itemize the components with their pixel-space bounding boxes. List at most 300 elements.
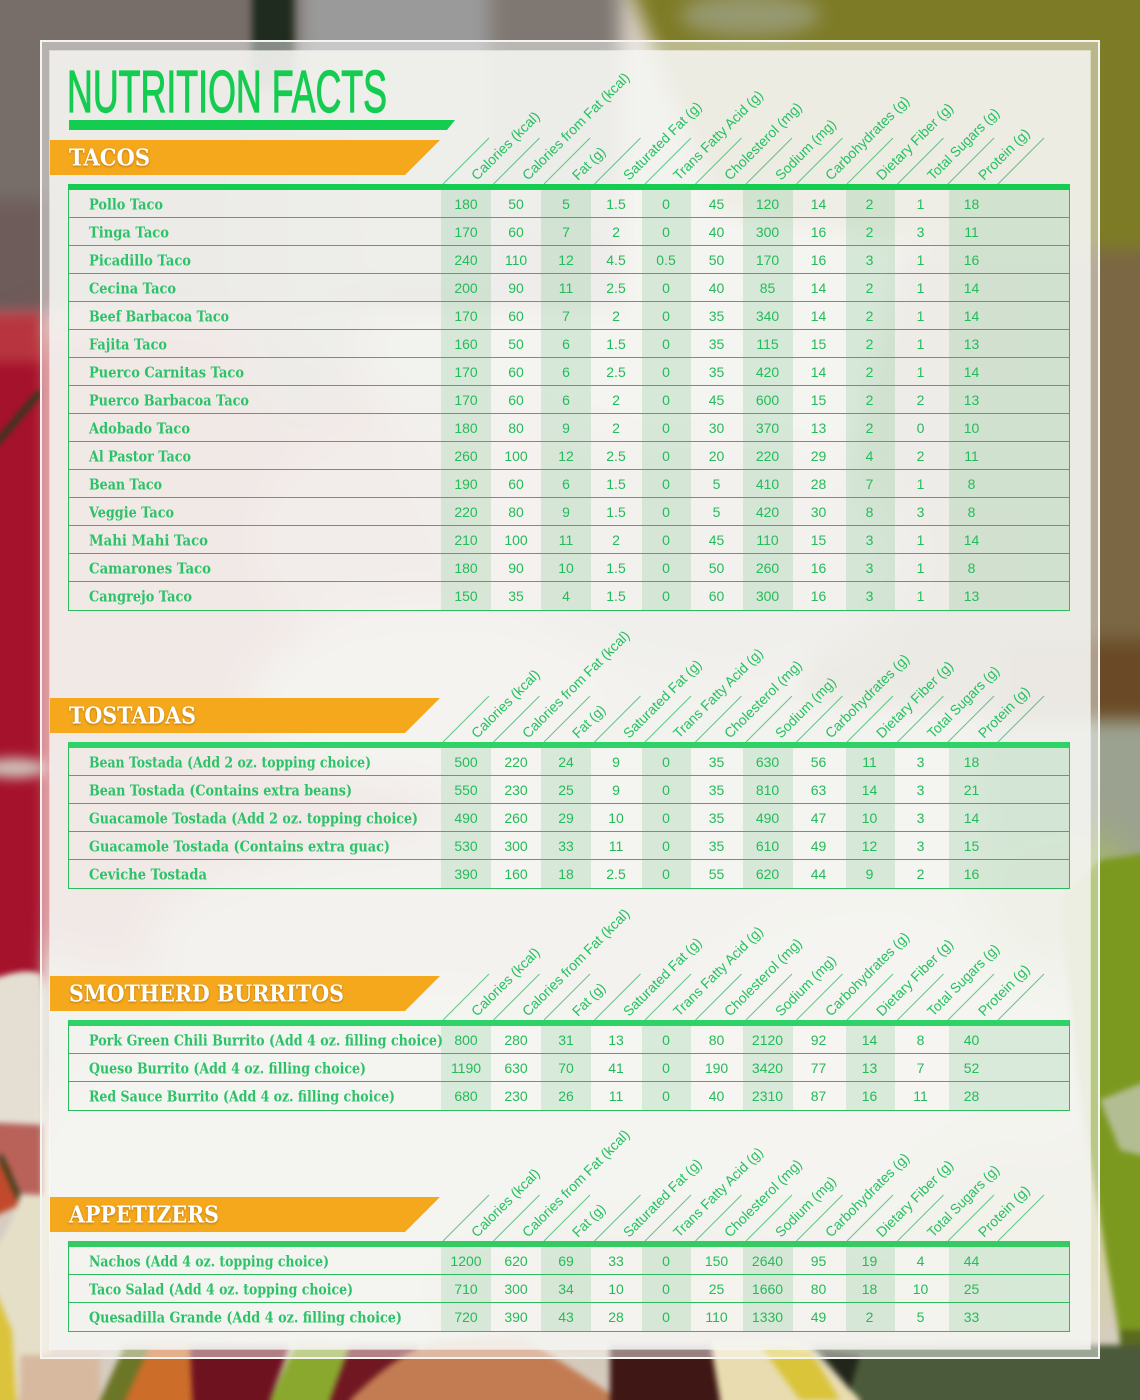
row: Queso Burrito: 41: [608, 1060, 624, 1076]
row: Ceviche Tostada: Ceviche Tostada: [89, 866, 208, 884]
column headers: tacos: Sodium (mg): [772, 116, 839, 183]
row: Queso Burrito: 1190: [451, 1060, 481, 1076]
row: Ceviche Tostada: 620: [756, 866, 779, 882]
row: Tinga Taco: 0: [662, 224, 670, 240]
row: Puerco Barbacoa Taco: Puerco Barbacoa Taco: [89, 392, 249, 410]
row: Queso Burrito: 52: [964, 1060, 979, 1076]
row: Bean Tostada, extra beans: 0: [662, 782, 670, 798]
row: Nachos: 19: [862, 1253, 877, 1269]
row: Veggie Taco: 0: [662, 504, 670, 520]
row: Ceviche Tostada: 0: [662, 866, 670, 882]
row: Fajita Taco: 15: [811, 336, 826, 352]
row: Nachos: 2640: [752, 1253, 783, 1269]
row: Tinga Taco: 16: [811, 224, 826, 240]
row: Camarones Taco: 3: [866, 560, 873, 576]
row: Taco Salad: 25: [709, 1281, 724, 1297]
row: Bean Tostada, extra beans: 550: [454, 782, 478, 798]
row: Quesadilla Grande: 0: [662, 1309, 670, 1325]
row: Pollo Taco: 180: [454, 196, 478, 212]
row: Pollo Taco: 120: [756, 196, 779, 212]
row: Mahi Mahi Taco: 15: [811, 532, 826, 548]
row: Bean Taco: 8: [968, 476, 975, 492]
row: Picadillo Taco: 3: [866, 252, 873, 268]
row: Tinga Taco: 300: [756, 224, 779, 240]
row: Nachos: Nachos (Add 4 oz. topping choice): [89, 1254, 329, 1270]
row: Picadillo Taco: Picadillo Taco: [89, 252, 191, 270]
row: Cangrejo Taco: 150: [454, 588, 478, 604]
column headers: appetizers: Saturated Fat (g): [620, 1155, 705, 1240]
row: Pollo Taco: 14: [811, 196, 826, 212]
row: Cecina Taco: 85: [760, 280, 775, 296]
row: Red Sauce Burrito: 2310: [752, 1088, 783, 1104]
table: tacos: [68, 184, 1070, 611]
row: Picadillo Taco: 12: [558, 252, 574, 268]
row: Adobado Taco: 9: [562, 420, 570, 436]
row: Ceviche Tostada: 160: [504, 866, 528, 882]
row: Pork Green Chili Burrito: 280: [504, 1032, 528, 1048]
column headers: smotherd burritos: Fat (g): [569, 980, 608, 1019]
row: Camarones Taco: 16: [811, 560, 826, 576]
row: Guacamole Tostada, topping choice: Guacamole Tostada (Add 2 oz. topping choice): [89, 810, 418, 828]
row: Picadillo Taco: 170: [756, 252, 779, 268]
row: Mahi Mahi Taco: 3: [866, 532, 873, 548]
column headers: smotherd burritos: Calories (kcal): [468, 944, 543, 1019]
row: Mahi Mahi Taco: 14: [964, 532, 979, 548]
row: Queso Burrito: 630: [504, 1060, 528, 1076]
column headers: tacos: Trans Fatty Acid (g): [670, 87, 766, 183]
row: Taco Salad: 34: [558, 1281, 574, 1297]
row: Pork Green Chili Burrito: 31: [558, 1032, 574, 1048]
row: Bean Taco: 1.5: [606, 476, 626, 492]
row: Cecina Taco: 14: [964, 280, 979, 296]
row: Pollo Taco: 0: [662, 196, 670, 212]
row: Pork Green Chili Burrito: 40: [964, 1032, 979, 1048]
row: Bean Taco: 190: [454, 476, 478, 492]
row: Fajita Taco: 35: [709, 336, 724, 352]
row: Al Pastor Taco: [69, 442, 1069, 470]
row: Queso Burrito: 7: [917, 1060, 924, 1076]
row: Ceviche Tostada: 44: [811, 866, 826, 882]
row: Guacamole Tostada, topping choice: 0: [662, 810, 670, 826]
row: Queso Burrito: 13: [862, 1060, 877, 1076]
column headers: tostadas: Calories from Fat (kcal): [519, 627, 633, 741]
row: Al Pastor Taco: 12: [558, 448, 574, 464]
row: Bean Taco: 410: [756, 476, 779, 492]
row: Guacamole Tostada, topping choice: 35: [709, 810, 724, 826]
row: Bean Taco: Bean Taco: [89, 476, 162, 494]
row: Nachos: 150: [705, 1253, 728, 1269]
row: Puerco Barbacoa Taco: 2: [917, 392, 924, 408]
column headers: smotherd burritos: Calories from Fat (kcal): [519, 905, 633, 1019]
row: Camarones Taco: 90: [508, 560, 524, 576]
row: Guacamole Tostada, extra guac: 35: [709, 838, 724, 854]
row: Al Pastor Taco: 29: [811, 448, 826, 464]
row: Puerco Carnitas Taco: 35: [709, 364, 724, 380]
ribbon: tacos: TACOS: [69, 144, 150, 172]
row: Veggie Taco: 5: [713, 504, 720, 520]
row: Fajita Taco: 13: [964, 336, 979, 352]
row: Beef Barbacoa Taco: 340: [756, 308, 779, 324]
row: Tinga Taco: 3: [917, 224, 924, 240]
row: Puerco Barbacoa Taco: 15: [811, 392, 826, 408]
row: Al Pastor Taco: 100: [504, 448, 528, 464]
row: Quesadilla Grande: 49: [811, 1309, 826, 1325]
row: Queso Burrito: 77: [811, 1060, 826, 1076]
row: Ceviche Tostada: 18: [558, 866, 574, 882]
row: Quesadilla Grande: 5: [917, 1309, 924, 1325]
row: Ceviche Tostada: 9: [866, 866, 873, 882]
row: Puerco Carnitas Taco: 2: [866, 364, 873, 380]
row: Red Sauce Burrito: 40: [709, 1088, 724, 1104]
row: Quesadilla Grande: [89, 1309, 979, 1326]
row: Veggie Taco: 220: [454, 504, 478, 520]
row: Cecina Taco: [69, 274, 1069, 302]
row: Mahi Mahi Taco: 0: [662, 532, 670, 548]
ribbon: tostadas: TOSTADAS: [69, 702, 196, 730]
column headers: tostadas: Dietary Fiber (g): [873, 658, 956, 741]
row: Guacamole Tostada, extra guac: 49: [811, 838, 826, 854]
row: Camarones Taco: 10: [558, 560, 574, 576]
row: Guacamole Tostada, extra guac: [69, 832, 1069, 860]
row: Puerco Carnitas Taco: 14: [964, 364, 979, 380]
row: Puerco Carnitas Taco: Puerco Carnitas Taco: [89, 364, 244, 382]
row: Adobado Taco: Adobado Taco: [88, 420, 190, 438]
row: Guacamole Tostada, extra guac: 11: [609, 838, 623, 854]
row: Taco Salad: 80: [811, 1281, 826, 1297]
row: Cangrejo Taco: 16: [811, 588, 826, 604]
row: Bean Tostada, extra beans: Bean Tostada (Contains extra beans): [89, 782, 352, 800]
row: Red Sauce Burrito: 11: [609, 1088, 623, 1104]
row: Fajita Taco: 1: [917, 336, 924, 352]
row: Quesadilla Grande: 1330: [752, 1309, 783, 1325]
column headers: tostadas: Saturated Fat (g): [620, 656, 705, 741]
row: Fajita Taco: 115: [756, 336, 779, 352]
column headers: tostadas: Total Sugars (g): [924, 663, 1002, 741]
row: Tinga Taco: 60: [508, 224, 524, 240]
row: Al Pastor Taco: 4: [866, 448, 873, 464]
row: Pork Green Chili Burrito: [69, 1026, 1069, 1054]
row: Adobado Taco: 370: [756, 420, 779, 436]
row: Quesadilla Grande: 28: [608, 1309, 624, 1325]
row: Taco Salad: 300: [504, 1281, 528, 1297]
row: Al Pastor Taco: Al Pastor Taco: [88, 448, 191, 466]
column headers: tostadas: Trans Fatty Acid (g): [670, 645, 766, 741]
row: Puerco Barbacoa Taco: 600: [756, 392, 779, 408]
column headers: tostadas: Calories (kcal): [468, 666, 543, 741]
row: Cecina Taco: 11: [559, 280, 573, 296]
table: appetizers: [68, 1241, 1070, 1332]
row: Guacamole Tostada, topping choice: 3: [917, 810, 924, 826]
row: Pollo Taco: 1.5: [606, 196, 626, 212]
column headers: appetizers: Calories from Fat (kcal): [519, 1126, 633, 1240]
row: Mahi Mahi Taco: [69, 526, 1069, 554]
ribbon: appetizers: [50, 1197, 440, 1232]
row: Quesadilla Grande: 43: [558, 1309, 574, 1325]
row: Adobado Taco: [69, 414, 1069, 442]
row: Quesadilla Grande: Quesadilla Grande (Add 4 oz. filling choice): [89, 1310, 402, 1326]
row: Bean Tostada, extra beans: 9: [612, 782, 620, 798]
row: Queso Burrito: 3420: [752, 1060, 783, 1076]
row: Ceviche Tostada: 2.5: [606, 866, 626, 882]
column headers: tacos: Protein (g): [975, 125, 1033, 183]
row: Veggie Taco: Veggie Taco: [88, 504, 174, 522]
row: Queso Burrito: 0: [662, 1060, 670, 1076]
row: Fajita Taco: 50: [508, 336, 524, 352]
row: Red Sauce Burrito: 680: [454, 1088, 478, 1104]
row: Red Sauce Burrito: 11: [913, 1088, 928, 1104]
row: Bean Taco: 28: [811, 476, 826, 492]
row: Beef Barbacoa Taco: 35: [709, 308, 724, 324]
row: Puerco Carnitas Taco: [69, 358, 1069, 386]
row: Guacamole Tostada, extra guac: Guacamole Tostada (Contains extra guac): [89, 838, 390, 856]
row: Red Sauce Burrito: 230: [504, 1088, 528, 1104]
row: Fajita Taco: 160: [454, 336, 478, 352]
row: Red Sauce Burrito: Red Sauce Burrito (Add 4 oz. filling choice): [89, 1088, 395, 1106]
row: Bean Tostada, extra beans: 25: [558, 782, 574, 798]
row: Cangrejo Taco: 3: [866, 588, 873, 604]
row: Adobado Taco: 180: [454, 420, 478, 436]
row: Puerco Carnitas Taco: 420: [756, 364, 779, 380]
row: Nachos: 4: [917, 1253, 924, 1269]
row: Puerco Barbacoa Taco: 60: [508, 392, 524, 408]
row: Bean Tostada, extra beans: 35: [709, 782, 724, 798]
column headers: appetizers: Dietary Fiber (g): [873, 1157, 956, 1240]
row: Cangrejo Taco: Cangrejo Taco: [89, 588, 192, 606]
row: Quesadilla Grande: 390: [504, 1309, 528, 1325]
row: Cangrejo Taco: 300: [756, 588, 779, 604]
row: Taco Salad: 10: [608, 1281, 624, 1297]
ribbon: tacos: [50, 140, 440, 175]
row: Adobado Taco: 10: [964, 420, 979, 436]
row: Bean Tostada, topping choice: 56: [811, 754, 826, 770]
row: Red Sauce Burrito: 16: [862, 1088, 877, 1104]
row: Taco Salad: 710: [454, 1281, 478, 1297]
row: Guacamole Tostada, topping choice: [69, 804, 1069, 832]
row: Red Sauce Burrito: 26: [558, 1088, 574, 1104]
row: Guacamole Tostada, extra guac: 12: [862, 838, 877, 854]
row: Beef Barbacoa Taco: 2: [866, 308, 873, 324]
row: Veggie Taco: 1.5: [606, 504, 626, 520]
row: Guacamole Tostada, topping choice: 47: [811, 810, 826, 826]
row: Mahi Mahi Taco: 210: [454, 532, 478, 548]
row: Pollo Taco: 50: [508, 196, 524, 212]
row: Pork Green Chili Burrito: 80: [709, 1032, 724, 1048]
row: Puerco Barbacoa Taco: 0: [662, 392, 670, 408]
row: Queso Burrito: Queso Burrito (Add 4 oz. filling choice): [89, 1060, 366, 1078]
row: Guacamole Tostada, topping choice: 10: [608, 810, 624, 826]
column headers: tostadas: Protein (g): [975, 683, 1033, 741]
column headers: tostadas: Fat (g): [569, 702, 608, 741]
row: Cecina Taco: 40: [709, 280, 724, 296]
row: Veggie Taco: 9: [562, 504, 570, 520]
row: Bean Tostada, extra beans: 230: [504, 782, 528, 798]
row: Beef Barbacoa Taco: 1: [917, 308, 924, 324]
row: Puerco Barbacoa Taco: 13: [964, 392, 979, 408]
row: Bean Taco: 7: [866, 476, 873, 492]
row: Adobado Taco: 2: [866, 420, 873, 436]
column headers: tostadas: Cholesterol (mg): [721, 657, 805, 741]
column headers: smotherd burritos: Carbohydrates (g): [822, 929, 912, 1019]
row: Cecina Taco: 2: [866, 280, 873, 296]
row: Cecina Taco: Cecina Taco: [89, 280, 176, 298]
row: Adobado Taco: 13: [811, 420, 826, 436]
row: Camarones Taco: [69, 554, 1069, 582]
column headers: smotherd burritos: [443, 905, 1044, 1020]
row: Mahi Mahi Taco: 110: [756, 532, 779, 548]
row: Puerco Carnitas Taco: 0: [662, 364, 670, 380]
column headers: tacos: Cholesterol (mg): [721, 99, 805, 183]
row: Mahi Mahi Taco: 11: [559, 532, 573, 548]
row: Puerco Barbacoa Taco: 2: [612, 392, 620, 408]
row: Puerco Carnitas Taco: 1: [917, 364, 924, 380]
row: Tinga Taco: Tinga Taco: [89, 224, 169, 242]
row: Pollo Taco: 5: [562, 196, 570, 212]
row: Guacamole Tostada, extra guac: 3: [917, 838, 924, 854]
row: Camarones Taco: 1: [917, 560, 924, 576]
column headers: appetizers: Protein (g): [975, 1182, 1033, 1240]
row: Bean Taco: [69, 470, 1069, 498]
row: Bean Tostada, topping choice: 0: [662, 754, 670, 770]
row: Bean Tostada, topping choice: 500: [454, 754, 478, 770]
row: Queso Burrito: [69, 1054, 1069, 1082]
row: Cangrejo Taco: 13: [964, 588, 979, 604]
row: Al Pastor Taco: 260: [454, 448, 478, 464]
row: Bean Tostada, topping choice: 9: [612, 754, 620, 770]
row: Cangrejo Taco: 1: [917, 588, 924, 604]
row: Cangrejo Taco: 35: [508, 588, 524, 604]
row: Bean Taco: 60: [508, 476, 524, 492]
row: Red Sauce Burrito: 28: [964, 1088, 979, 1104]
column headers: smotherd burritos: Saturated Fat (g): [620, 934, 705, 1019]
row: Puerco Carnitas Taco: 6: [562, 364, 570, 380]
row: Adobado Taco: 30: [709, 420, 724, 436]
row: Guacamole Tostada, topping choice: 490: [756, 810, 779, 826]
row: Tinga Taco: 2: [866, 224, 873, 240]
row: Pork Green Chili Burrito: 800: [454, 1032, 478, 1048]
row: Camarones Taco: 1.5: [606, 560, 626, 576]
row: Cecina Taco: 0: [662, 280, 670, 296]
row: Guacamole Tostada, extra guac: 300: [504, 838, 528, 854]
column headers: tostadas: Sodium (mg): [772, 674, 839, 741]
row: Pork Green Chili Burrito: 2120: [752, 1032, 783, 1048]
ribbon: appetizers: APPETIZERS: [68, 1202, 219, 1228]
row: Beef Barbacoa Taco: 7: [562, 308, 570, 324]
row: Guacamole Tostada, topping choice: 260: [504, 810, 528, 826]
row: Veggie Taco: 3: [917, 504, 924, 520]
row: Taco Salad: Taco Salad (Add 4 oz. topping choice): [89, 1282, 353, 1298]
row: Cecina Taco: 2.5: [606, 280, 626, 296]
row: Picadillo Taco: [69, 246, 1069, 274]
row: Puerco Carnitas Taco: 170: [454, 364, 478, 380]
column headers: tacos: Calories from Fat (kcal): [519, 69, 633, 183]
row: Ceviche Tostada: [89, 866, 979, 884]
ribbon: smotherd burritos: SMOTHERD BURRITOS: [69, 980, 344, 1008]
row: Mahi Mahi Taco: 1: [917, 532, 924, 548]
row: Camarones Taco: 260: [756, 560, 779, 576]
column headers: appetizers: Carbohydrates (g): [822, 1150, 912, 1240]
row: Fajita Taco: [69, 330, 1069, 358]
row: Nachos: 0: [662, 1253, 670, 1269]
row: Pork Green Chili Burrito: 14: [862, 1032, 877, 1048]
table: tostadas: [68, 742, 1070, 889]
column headers: appetizers: Trans Fatty Acid (g): [670, 1144, 766, 1240]
row: Picadillo Taco: 16: [964, 252, 979, 268]
row: Beef Barbacoa Taco: Beef Barbacoa Taco: [89, 308, 229, 326]
row: Bean Taco: 6: [562, 476, 570, 492]
row: Queso Burrito: 70: [558, 1060, 574, 1076]
title: NUTRITION FACTS: [67, 59, 387, 125]
row: Camarones Taco: Camarones Taco: [89, 560, 211, 578]
column headers: appetizers: Sodium (mg): [772, 1173, 839, 1240]
row: Pork Green Chili Burrito: 8: [917, 1032, 924, 1048]
column headers: tacos: Saturated Fat (g): [620, 98, 705, 183]
row: Veggie Taco: 80: [508, 504, 524, 520]
row: Bean Tostada, topping choice: 35: [709, 754, 724, 770]
column headers: tacos: Calories (kcal): [468, 108, 543, 183]
row: Pollo Taco: [69, 190, 1069, 218]
row: Al Pastor Taco: 0: [662, 448, 670, 464]
row: Bean Tostada, topping choice: [69, 748, 1069, 776]
row: Guacamole Tostada, topping choice: 490: [454, 810, 478, 826]
row: Guacamole Tostada, topping choice: 14: [964, 810, 979, 826]
row: Puerco Barbacoa Taco: 170: [454, 392, 478, 408]
row: Puerco Carnitas Taco: 2.5: [606, 364, 626, 380]
row: Ceviche Tostada: 2: [917, 866, 924, 882]
row: Guacamole Tostada, topping choice: 10: [862, 810, 877, 826]
row: Cangrejo Taco: 0: [662, 588, 670, 604]
row: Pork Green Chili Burrito: 0: [662, 1032, 670, 1048]
row: Picadillo Taco: 1: [917, 252, 924, 268]
column headers: tostadas: [443, 627, 1044, 742]
row: Taco Salad: [69, 1275, 1069, 1303]
row: Picadillo Taco: 16: [811, 252, 826, 268]
title underline: [69, 120, 455, 130]
row: Adobado Taco: 0: [917, 420, 924, 436]
row: Ceviche Tostada: 16: [964, 866, 979, 882]
row: Camarones Taco: 50: [709, 560, 724, 576]
row: Cangrejo Taco: 60: [709, 588, 724, 604]
row: Beef Barbacoa Taco: 14: [811, 308, 826, 324]
column headers: tacos: Total Sugars (g): [924, 105, 1002, 183]
row: Cangrejo Taco: 4: [562, 588, 570, 604]
row: Quesadilla Grande: 110: [705, 1309, 728, 1325]
row: Fajita Taco: 1.5: [606, 336, 626, 352]
row: Fajita Taco: 0: [662, 336, 670, 352]
row: Beef Barbacoa Taco: 60: [508, 308, 524, 324]
row: Cecina Taco: 1: [917, 280, 924, 296]
row: Picadillo Taco: 110: [505, 252, 527, 268]
row: Guacamole Tostada, extra guac: 0: [662, 838, 670, 854]
row: Nachos: 69: [558, 1253, 574, 1269]
row: Taco Salad: 10: [913, 1281, 928, 1297]
row: Bean Tostada, topping choice: 630: [756, 754, 779, 770]
row: Bean Tostada, extra beans: 14: [862, 782, 877, 798]
row: Tinga Taco: 11: [964, 224, 979, 240]
column headers: smotherd burritos: Cholesterol (mg): [721, 935, 805, 1019]
row: Bean Tostada, topping choice: 11: [862, 754, 877, 770]
row: Cangrejo Taco: [89, 588, 979, 606]
row: Puerco Carnitas Taco: 60: [508, 364, 524, 380]
row: Picadillo Taco: 240: [454, 252, 478, 268]
column headers: appetizers: Cholesterol (mg): [721, 1156, 805, 1240]
row: Veggie Taco: 30: [811, 504, 826, 520]
row: Camarones Taco: 8: [968, 560, 975, 576]
column headers: tacos: Dietary Fiber (g): [873, 100, 956, 183]
column headers: smotherd burritos: Total Sugars (g): [924, 941, 1002, 1019]
row: Ceviche Tostada: 390: [454, 866, 478, 882]
column headers: appetizers: [443, 1126, 1044, 1241]
row: Camarones Taco: 180: [454, 560, 478, 576]
